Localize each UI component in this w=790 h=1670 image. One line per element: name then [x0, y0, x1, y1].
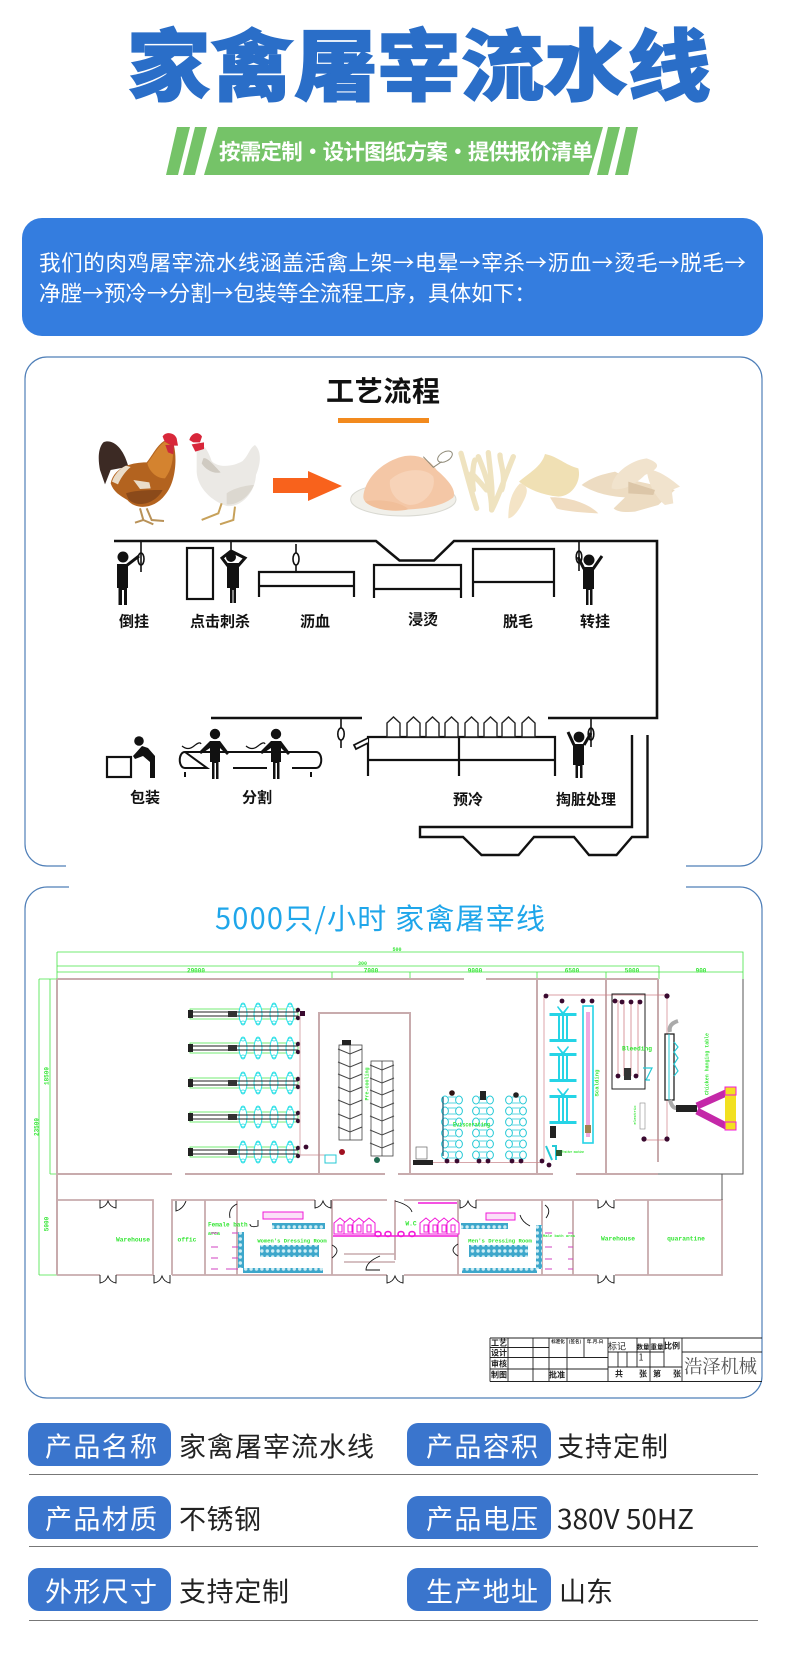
heading underline [338, 418, 429, 423]
title block: 重量 [650, 1341, 664, 1351]
icon: cutter 2 [260, 729, 290, 779]
title block: (签名) [569, 1338, 581, 1345]
dimension numbers: 6500 [565, 968, 580, 974]
spec: capacity: 产品容积 [426, 1426, 538, 1464]
dimension numbers: 300 [358, 961, 367, 967]
room labels: W.C [405, 1220, 417, 1228]
dimension numbers: 9000 [468, 968, 483, 974]
title block: 批准 [549, 1370, 565, 1380]
spec: origin [407, 1568, 613, 1611]
icon: chiller [354, 717, 555, 776]
spec: product name: 产品名称 [45, 1426, 157, 1464]
spec: voltage: 产品电压 [426, 1498, 538, 1537]
labels upper: 脱毛 [503, 610, 533, 632]
icon: overhead hook [338, 719, 344, 748]
spec: dimensions: 外形尺寸 [45, 1570, 157, 1610]
spec: origin: 山东 [559, 1570, 613, 1610]
labels lower: 掏脏处理 [556, 788, 616, 810]
flow lower [107, 717, 648, 855]
spec: voltage: 380V 50HZ [557, 1498, 694, 1537]
bleeding area [612, 993, 670, 1142]
room labels: area [208, 1231, 220, 1237]
icon: evisceration worker [568, 719, 594, 778]
room labels: offic [178, 1236, 197, 1244]
chart: factory floor plan [34, 947, 762, 1382]
labels upper: 沥血 [300, 610, 330, 632]
intro panel: 我们的肉鸡屠宰流水线涵盖活禽上架→电晕→宰杀→沥血→烫毛→脱毛→ [39, 246, 746, 278]
panel: layout plan [25, 887, 762, 1398]
heading: capacity: 5000只/小时 家禽屠宰线 [215, 896, 545, 938]
icon: cutter 1 [199, 729, 229, 779]
bleeding area: Bleeding [622, 1046, 652, 1052]
washrooms [211, 1203, 573, 1269]
subtitle banner [166, 127, 638, 175]
icon: stun cabinet [187, 548, 213, 599]
scalding and plucking: Feather machine [562, 1150, 584, 1154]
dimension numbers: 5000 [44, 1216, 50, 1231]
title block: 年.月.日 [587, 1338, 603, 1345]
live bird hanging [665, 1021, 736, 1130]
dimension numbers: 18500 [44, 1067, 50, 1085]
room labels: Women's Dressing Room [257, 1238, 327, 1244]
evisceration tables [413, 1090, 544, 1165]
icon: packing worker [107, 736, 155, 778]
pre-cooling racks: Pre-cooling [364, 1068, 370, 1100]
title block: 制图 [491, 1370, 507, 1380]
live bird hanging: Chicken hanging table [704, 1032, 710, 1095]
title block: 数量 [636, 1341, 650, 1351]
icon: chicken wing [508, 454, 598, 518]
spec: capacity: 支持定制 [557, 1426, 668, 1464]
title block: 共 [615, 1368, 623, 1380]
dimension numbers: 7000 [364, 968, 379, 974]
room labels: Female bath [208, 1222, 248, 1228]
spec: dimensions [28, 1568, 289, 1611]
spec: material [28, 1496, 261, 1539]
evisceration tables: Eviscerating [453, 1122, 490, 1128]
labels upper: 倒挂 [119, 610, 149, 632]
title: 家禽屠宰流水线 [127, 5, 711, 117]
icon: killing worker [222, 542, 245, 603]
icon: cutting conveyor [180, 729, 321, 779]
room labels: Male bath area [543, 1234, 576, 1239]
lockers [238, 1223, 542, 1273]
spec: material: 不锈钢 [179, 1498, 261, 1537]
spec: voltage [407, 1496, 694, 1539]
icon: chicken wings pile [582, 458, 680, 512]
labels upper: 转挂 [580, 610, 610, 632]
labels upper: 点击刺杀 [190, 610, 250, 632]
scalding and plucking: Scalding [594, 1069, 600, 1096]
dimension numbers: 23500 [34, 1118, 40, 1136]
labels lower: 预冷 [453, 788, 483, 810]
room labels: Warehouse [116, 1236, 150, 1244]
subtitle banner: 按需定制·设计图纸方案·提供报价清单 [219, 136, 593, 166]
pre-cooling racks [338, 1040, 394, 1163]
spec: product name: 家禽屠宰流水线 [179, 1426, 374, 1464]
room labels: quarantine [667, 1236, 705, 1242]
title block: 设计 [491, 1348, 507, 1358]
room labels: Warehouse [601, 1236, 635, 1242]
spec: origin: 生产地址 [426, 1570, 538, 1610]
labels upper [119, 608, 610, 632]
room labels [116, 1220, 705, 1244]
title block: 第 [653, 1368, 661, 1380]
icon: white hen [189, 433, 260, 524]
panel: process flow [25, 357, 762, 866]
spec: capacity [407, 1423, 668, 1466]
title block: 审核 [491, 1358, 507, 1370]
spec: product name [28, 1423, 374, 1466]
dimension numbers: 5000 [625, 968, 640, 974]
flow line upper [114, 541, 657, 718]
cutting lines [188, 1003, 345, 1163]
title block: 标准化 [551, 1338, 565, 1345]
dimension lines [39, 952, 743, 1275]
bleeding area: electric [633, 1105, 638, 1125]
title block: 张 [639, 1368, 647, 1380]
icon: rooster [99, 433, 178, 524]
icon: chicken feet [461, 453, 513, 510]
title block: 工艺 [491, 1338, 507, 1348]
dimension numbers: 900 [696, 968, 707, 974]
dimension numbers: 29000 [187, 968, 205, 974]
icon: bleeding table [259, 544, 354, 597]
spec: dimensions: 支持定制 [179, 1570, 289, 1610]
spec: material: 产品材质 [45, 1498, 157, 1537]
dimension numbers: 500 [392, 947, 402, 953]
title block: 标记 [608, 1340, 626, 1352]
arrow [273, 471, 342, 501]
icon: hanging worker [117, 542, 144, 605]
title block [490, 1338, 762, 1382]
icon: rehang worker [576, 542, 602, 605]
intro panel [22, 218, 763, 336]
labels lower [130, 786, 616, 810]
title block: 1 [638, 1350, 644, 1364]
walls [57, 979, 722, 1275]
icon: plucker [473, 549, 554, 597]
icon: whole chicken on plate [351, 449, 456, 516]
icon: offal pipes [420, 735, 648, 855]
intro panel: 净膛→预冷→分割→包装等全流程工序，具体如下： [39, 277, 536, 308]
doors [100, 1200, 614, 1283]
scalding and plucking [544, 994, 667, 1167]
room labels: Men's Dressing Room [468, 1238, 533, 1244]
icon: scald tank [374, 565, 461, 598]
title block: 张 [673, 1368, 681, 1380]
heading: process flow: 工艺流程 [326, 370, 440, 410]
labels upper: 浸烫 [408, 608, 438, 630]
labels lower: 包装 [130, 786, 160, 808]
labels lower: 分割 [242, 786, 272, 808]
dimension numbers [34, 947, 707, 1231]
title block: 浩泽机械 [684, 1353, 757, 1379]
title block: 比例 [664, 1340, 680, 1352]
